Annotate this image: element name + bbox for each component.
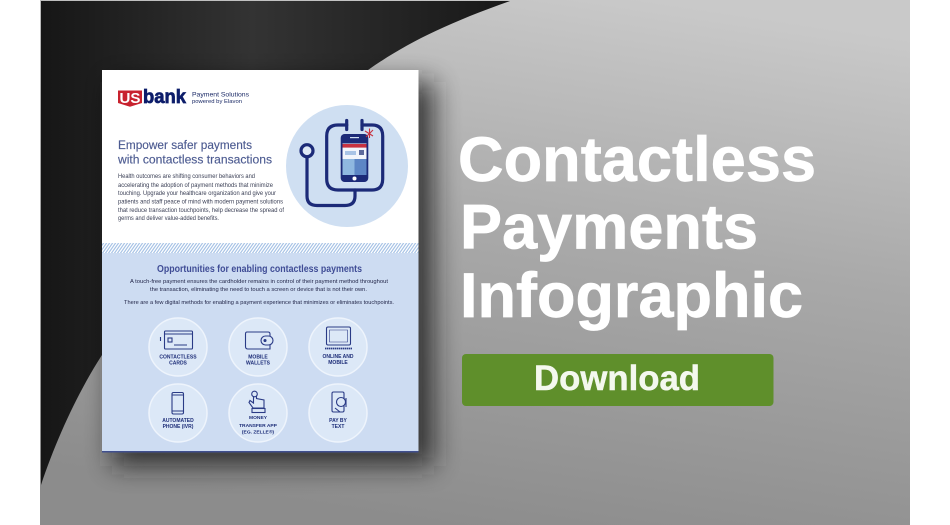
title xyxy=(458,125,816,331)
heading: empower safer payments: Empower safer payments xyxy=(118,138,252,152)
icon: contactless cards: CONTACTLESS xyxy=(159,354,197,360)
text block: intro paragraph: accelerating the adoption of payment methods that minimize xyxy=(118,182,274,189)
icon: contactless cards: CARDS xyxy=(169,360,188,366)
heading: empower safer payments: with contactless transactions xyxy=(117,152,272,166)
logo: US Bank: US xyxy=(120,90,140,107)
icon: mobile wallets xyxy=(229,318,287,376)
icon: automated phone: AUTOMATED xyxy=(162,418,194,424)
icon: automated phone: PHONE (IVR) xyxy=(163,424,194,430)
text block: intro paragraph: Health outcomes are shifting consumer behaviors and xyxy=(118,173,256,180)
icon: money transfer app xyxy=(229,384,287,442)
text block: touch-free description: the transaction, eliminating the need to touch a screen or device that is not their own. xyxy=(150,287,367,293)
title: Payments xyxy=(460,192,758,262)
heading: empower safer payments xyxy=(117,138,272,166)
icon: money transfer app: MONEY xyxy=(249,415,268,421)
button: download: Download xyxy=(534,359,700,398)
heading: opportunities: Opportunities for enabling contactless payments xyxy=(157,264,362,275)
text block: intro paragraph: that reduce transaction touchpoints, help decrease the spread of xyxy=(118,207,284,214)
title: Infographic xyxy=(460,261,803,331)
icon: money transfer app: (EG. ZELLE®) xyxy=(242,428,274,436)
icon: online and mobile: ONLINE AND xyxy=(323,354,354,360)
logo: US Bank xyxy=(118,87,250,108)
icon: money transfer app: TRANSFER APP xyxy=(239,423,278,429)
logo: US Bank: powered by Elavon xyxy=(192,99,242,105)
icon: pay by text: PAY BY xyxy=(329,418,348,424)
document shadow xyxy=(112,82,434,466)
text block: touch-free description xyxy=(124,279,394,306)
text block: intro paragraph xyxy=(118,173,284,222)
icon: stethoscope and phone xyxy=(286,105,408,227)
panel: lower blue section xyxy=(102,252,418,452)
title: Contactless xyxy=(458,125,816,195)
icon: online and mobile xyxy=(309,318,367,376)
button: download xyxy=(462,354,774,406)
logo: US Bank: Payment Solutions xyxy=(192,92,250,98)
icon: pay by text: TEXT xyxy=(332,424,344,430)
icon: pay by text xyxy=(309,384,367,442)
text block: touch-free description: A touch-free payment ensures the cardholder remains in control of their payment method throughout xyxy=(130,279,388,285)
text block: intro paragraph: touching. Upgrade your healthcare organization and give your xyxy=(118,190,276,197)
logo: US Bank: bank xyxy=(143,87,186,108)
text block: intro paragraph: germs and deliver value-added benefits. xyxy=(118,215,219,222)
text block: intro paragraph: patients and staff peace of mind with modern payment solutions xyxy=(118,198,283,206)
icon: online and mobile: MOBILE xyxy=(328,360,348,366)
black swoosh xyxy=(41,1,510,485)
icon: automated phone xyxy=(149,384,207,442)
text block: touch-free description: There are a few digital methods for enabling a payment experience that minimizes or eliminates touchpoints. xyxy=(124,300,394,306)
panel: infographic document xyxy=(102,70,418,452)
icon: mobile wallets: MOBILE xyxy=(248,354,268,360)
icon: mobile wallets: WALLETS xyxy=(246,360,271,366)
icon: contactless cards xyxy=(149,318,207,376)
